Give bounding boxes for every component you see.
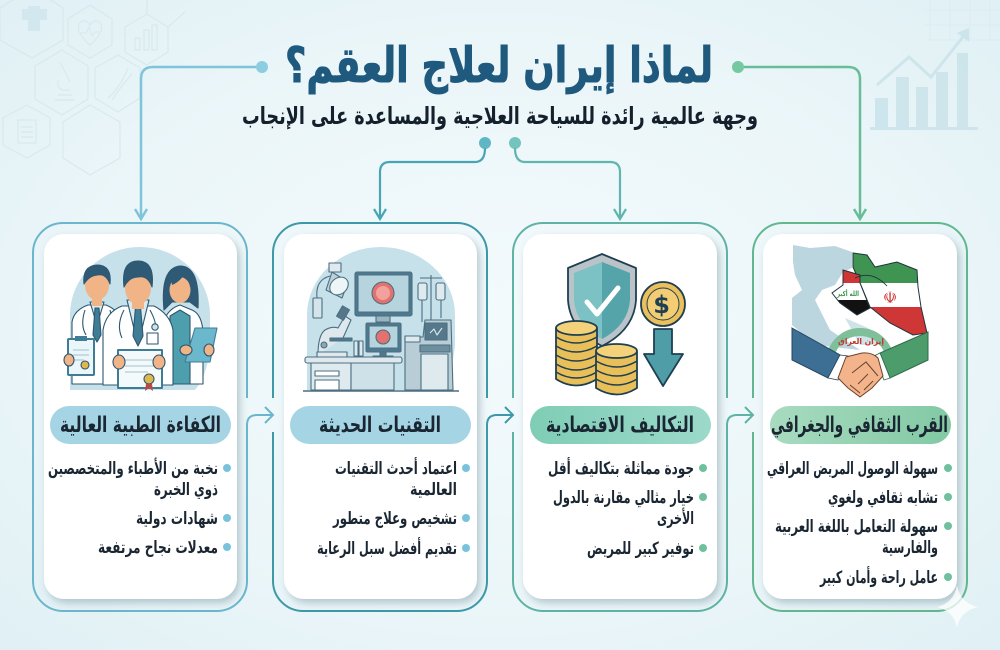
bullet list: الأخرى [657,508,694,529]
decorative rising bar chart [870,0,1000,130]
heading pill: التقنيات الحديثة [319,413,441,438]
card [44,234,237,599]
bullet list: خيار مثالي مقارنة بالدول [553,488,694,508]
heading pill [770,406,951,444]
heading pill [290,406,471,444]
subtitle: وجهة عالمية رائدة للسياحة العلاجية والمساعدة على الإنجاب [242,102,758,130]
heading pill [530,406,711,444]
bullet list: معدلات نجاح مرتفعة [98,538,218,558]
bullet list: جودة مماثلة بتكاليف أقل [548,457,694,479]
heading pill: التكاليف الاقتصادية [546,413,694,438]
bullet list: ذوي الخبرة [154,480,218,500]
panel: economic costs [513,223,753,611]
icon: map with Iraq and Iran flags and handshake: ☫ [883,288,897,307]
card [523,234,717,599]
panel: modern technologies [273,223,513,611]
title: لماذا إيران لعلاج العقم؟ [285,37,713,94]
panel frame with arrow to next panel [273,223,513,611]
connector: title to medical expertise [135,61,268,219]
panel: cultural and geographic proximity [753,223,967,611]
bullet list [317,457,470,559]
bullet list: العالمية [410,480,457,500]
connector: title to cultural proximity [732,61,866,219]
heading pill [50,406,231,444]
bullet list: والفارسية [882,538,938,558]
panel frame [753,223,967,611]
icon: laboratory equipment [303,247,459,391]
bullet list [767,459,952,588]
bullet list: تشخيص وعلاج متطور [332,509,457,529]
bullet list: توفير كبير للمريض [587,539,694,559]
bullet list: تقديم أفضل سبل الرعاية [317,537,457,559]
bullet list: تشابه ثقافي ولغوي [828,488,938,508]
icon: shield, coins and falling cost [556,254,685,394]
card [763,234,957,599]
icon: three doctors with certificates [64,247,217,391]
bullet list: شهادات دولية [136,509,218,529]
card [284,234,477,599]
icon: map with Iraq and Iran flags and handshake: إيران العراق [838,337,884,346]
bullet list [48,458,231,558]
icon: shield, coins and falling cost: $ [653,291,670,319]
icon: map with Iraq and Iran flags and handshake: الله أكبر [836,289,859,298]
bullet list: نخبة من الأطباء والمتخصصين [48,458,218,479]
heading pill: الكفاءة الطبية العالية [60,413,221,438]
icon: map with Iraq and Iran flags and handshake [792,245,930,397]
bullet list: عامل راحة وأمان كبير [819,566,938,588]
connector: title to economic costs [509,137,626,219]
connector: title to modern technologies [374,137,491,219]
panel: medical expertise [33,223,273,611]
decorative sparkle [937,585,978,628]
decorative medical hexagon icons [0,0,185,175]
panel frame with arrow to next panel [33,223,273,611]
bullet list: اعتماد أحدث التقنيات [335,457,457,479]
panel frame with arrow to next panel [513,223,753,611]
bullet list [548,457,707,559]
